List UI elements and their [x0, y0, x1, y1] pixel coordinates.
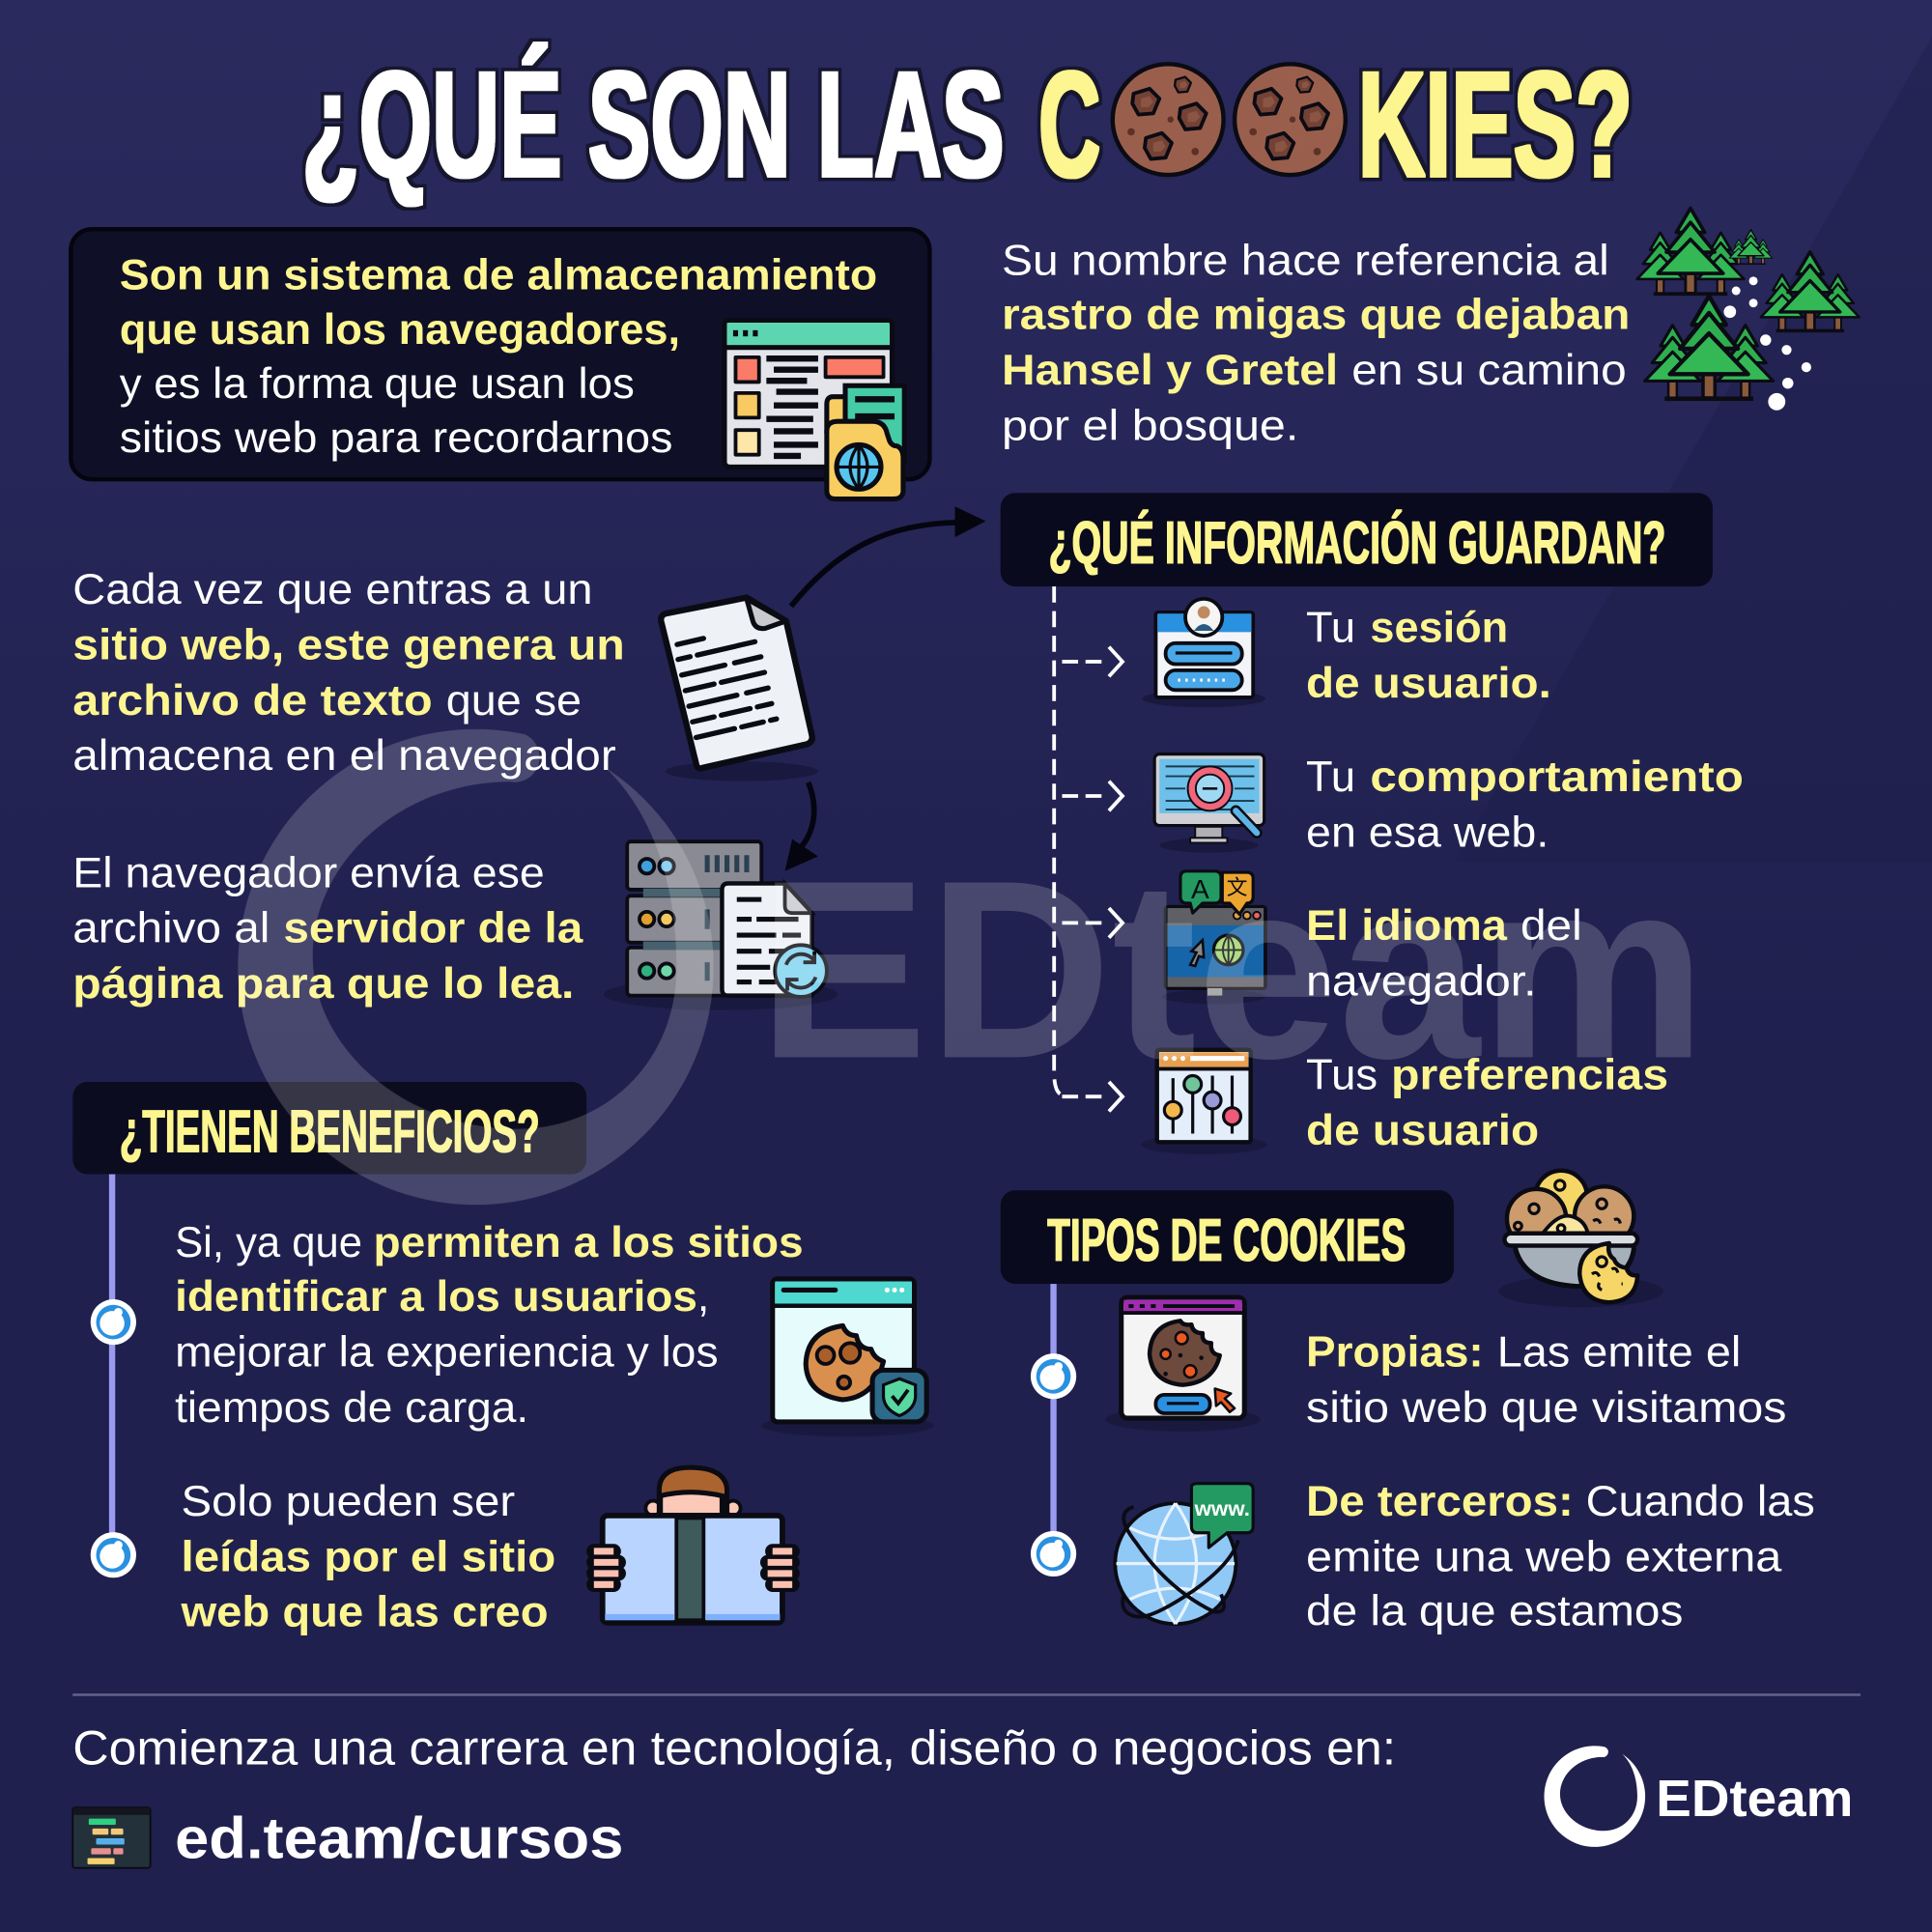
text block: preferences — [1306, 1052, 1668, 1154]
text block: behavior: Tu — [1306, 753, 1355, 801]
panel: definition: sitios web para recordarnos — [120, 414, 672, 462]
text block: language: El idioma — [1306, 902, 1508, 950]
timeline: benefits — [91, 1175, 136, 1577]
panel: definition — [71, 229, 929, 499]
timeline: cookie types — [1031, 1284, 1076, 1577]
text block: first party: Las emite el — [1497, 1329, 1741, 1377]
text block: browser sends file: servidor de la — [283, 905, 584, 952]
icon: title cookies — [1113, 64, 1346, 175]
text block: preferences: de usuario — [1306, 1107, 1539, 1154]
text block: first party: Propias: — [1306, 1329, 1484, 1377]
icon: first-party cookie window — [1105, 1297, 1261, 1432]
icon: settings sliders — [1141, 1050, 1266, 1154]
arrow: document to server — [784, 782, 818, 871]
text block: benefit one: identificar a los usuarios — [175, 1273, 697, 1321]
icon: code window — [72, 1807, 151, 1868]
text block: preferences: preferencias — [1391, 1052, 1668, 1099]
text block: behavior: comportamiento — [1370, 753, 1744, 801]
icon: monitor with magnifier — [1154, 754, 1264, 853]
text block: session — [1306, 605, 1551, 707]
heading: benefits: ¿TIENEN BENEFICIOS? — [120, 1098, 540, 1166]
text block: third party: Cuando las — [1586, 1478, 1815, 1525]
heading: what information — [1001, 493, 1713, 586]
text block: benefit one: , — [697, 1273, 709, 1321]
heading: cookie types: TIPOS DE COOKIES — [1047, 1207, 1406, 1274]
text block: origin of the name: Su nombre hace referencia al — [1002, 237, 1609, 284]
watermark logo — [238, 729, 1707, 1205]
text block: first party: sitio web que visitamos — [1306, 1384, 1786, 1432]
text block: text file: que se — [446, 677, 582, 724]
footer call to action — [72, 1721, 1396, 1870]
text block: origin of the name — [1002, 237, 1631, 449]
footer call to action: Comienza una carrera en tecnología, diseño o negocios en: — [72, 1721, 1396, 1776]
text block: origin of the name: por el bosque. — [1002, 402, 1298, 449]
text block: benefit one: permiten a los sitios — [373, 1219, 804, 1266]
icon: translation monitor: 文 — [1227, 875, 1247, 899]
text block: benefit one — [175, 1219, 804, 1432]
text block: origin of the name: en su camino — [1351, 347, 1627, 394]
text block: text file — [72, 566, 625, 780]
text block: third party: de la que estamos — [1306, 1587, 1683, 1634]
icon: server with file — [604, 841, 838, 1010]
panel: definition: que usan los navegadores, — [120, 306, 680, 354]
panel: definition: y es la forma que usan los — [120, 360, 635, 408]
icon: globe with www bubble: www. — [1194, 1496, 1250, 1520]
text block: session: de usuario. — [1306, 660, 1551, 707]
text block: benefit one: mejorar la experiencia y los — [175, 1329, 719, 1377]
footer logo — [1545, 1746, 1853, 1847]
heading: benefits — [72, 1082, 586, 1175]
text block: language — [1306, 902, 1582, 1006]
icon: browser storage — [724, 321, 904, 499]
text block: third party — [1306, 1478, 1815, 1634]
footer logo: EDteam — [1656, 1771, 1853, 1828]
text block: browser sends file: El navegador envía ese — [72, 849, 545, 896]
icon: translation monitor — [1162, 871, 1265, 1005]
icon: login card — [1142, 599, 1265, 707]
text block: first party — [1306, 1329, 1786, 1432]
watermark logo: EDteam — [757, 827, 1707, 1111]
text block: text file: almacena en el navegador — [72, 732, 616, 780]
text block: browser sends file: archivo al — [72, 905, 270, 952]
text block: benefit one: Si, ya que — [175, 1219, 362, 1266]
text block: text file: sitio web, este genera un — [72, 621, 625, 668]
title: ¿QUÉ SON LAS — [301, 40, 1005, 208]
text block: language: del — [1520, 902, 1582, 950]
arrow: document to heading — [791, 506, 985, 607]
text block: third party: De terceros: — [1306, 1478, 1574, 1525]
text block: browser sends file — [72, 849, 584, 1008]
text block: benefit two: leídas por el sitio — [182, 1533, 555, 1580]
text block: benefit two: Solo pueden ser — [182, 1478, 515, 1525]
icon: text document — [661, 598, 818, 781]
text block: third party: emite una web externa — [1306, 1533, 1782, 1580]
icon: secure cookie window — [761, 1279, 934, 1436]
text block: session: Tu — [1306, 605, 1355, 652]
text block: benefit one: tiempos de carga. — [175, 1384, 528, 1432]
text block: language: navegador. — [1306, 958, 1537, 1006]
footer call to action: ed.team/cursos — [175, 1805, 623, 1870]
footer divider — [72, 1693, 1861, 1696]
dashed connector with arrows — [1054, 586, 1122, 1112]
icon: forest and crumbs — [1637, 209, 1860, 411]
text block: benefit two: web que las creo — [180, 1589, 549, 1636]
text block: text file: archivo de texto — [72, 677, 433, 724]
text block: session: sesión — [1370, 605, 1508, 652]
text block: text file: Cada vez que entras a un — [72, 566, 593, 613]
text block: behavior: en esa web. — [1306, 809, 1548, 856]
title: C — [1038, 40, 1100, 208]
text block: origin of the name: Hansel y Gretel — [1002, 347, 1338, 394]
title: KIES? — [1358, 40, 1633, 208]
heading: cookie types — [1001, 1190, 1454, 1284]
icon: bowl of cookies — [1498, 1171, 1663, 1307]
text block: preferences: Tus — [1306, 1052, 1378, 1099]
panel: definition: Son un sistema de almacenamiento — [120, 252, 877, 299]
icon: globe with www bubble — [1115, 1484, 1253, 1624]
text block: behavior — [1306, 753, 1744, 856]
text block: benefit two — [180, 1478, 555, 1636]
text block: origin of the name: rastro de migas que dejaban — [1002, 292, 1630, 339]
text block: browser sends file: página para que lo lea. — [72, 960, 574, 1008]
icon: translation monitor: A — [1191, 874, 1209, 904]
icon: person reading — [594, 1467, 792, 1623]
